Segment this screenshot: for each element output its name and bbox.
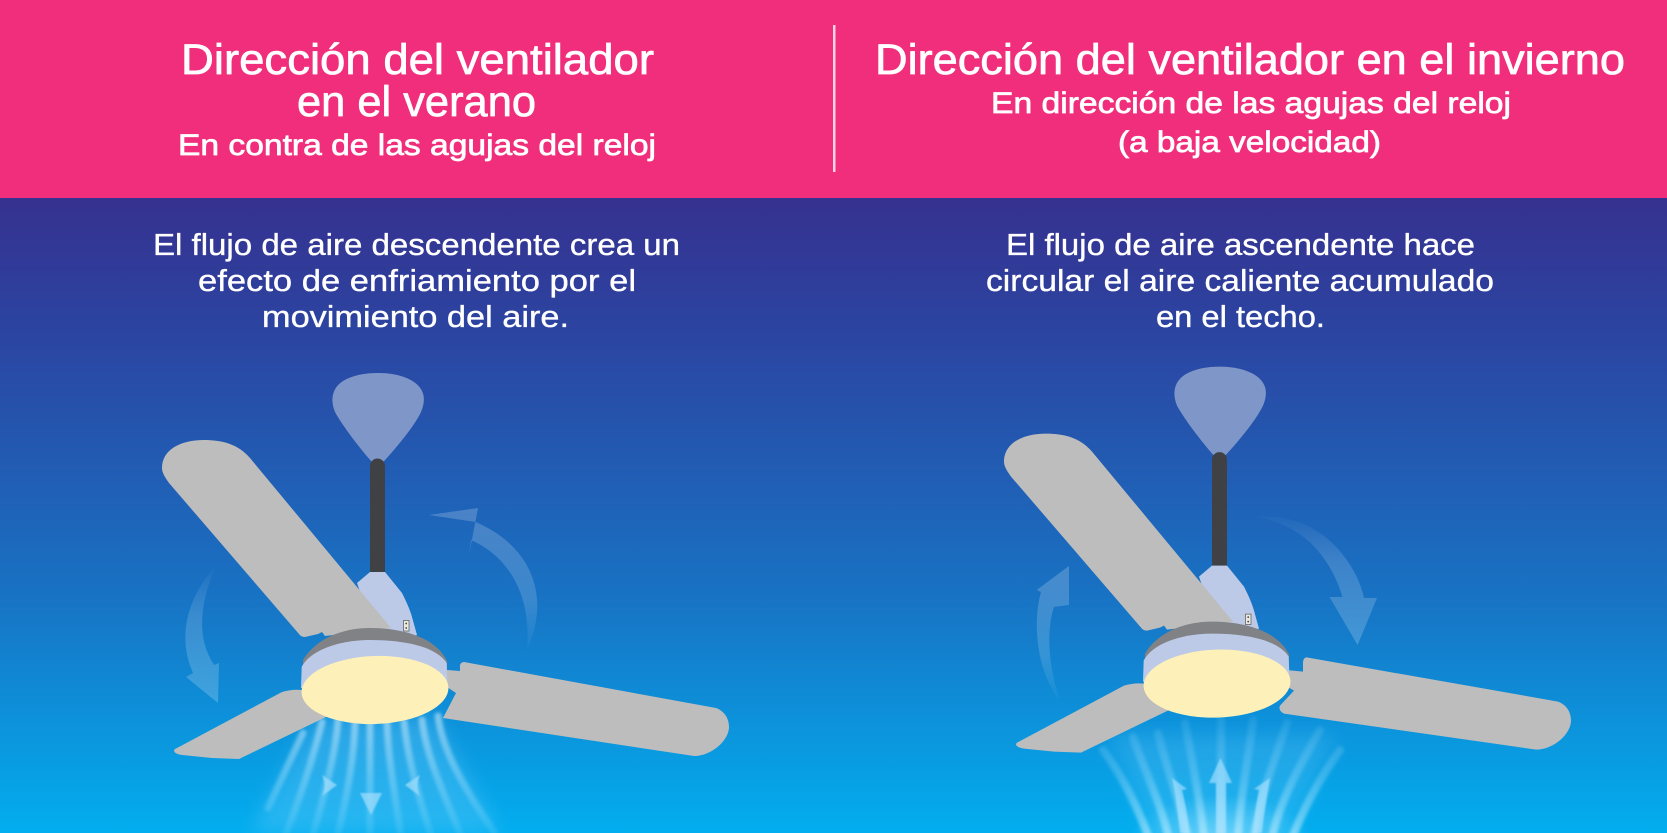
motor housing (1199, 566, 1259, 644)
background gradient panel (0, 198, 1667, 833)
text block: summer airflow (153, 227, 680, 334)
rotation arrow: counter-clockwise right (429, 508, 537, 650)
text block: winter airflow: El flujo de aire ascendente hace (1006, 227, 1475, 262)
blade: top left (1004, 434, 1233, 631)
header divider (833, 25, 836, 172)
text block: winter airflow (986, 227, 1494, 334)
rotation arrow: clockwise right (1254, 516, 1377, 645)
light band (301, 640, 448, 688)
canopy (1174, 367, 1266, 462)
fan: winter (1004, 367, 1571, 753)
motor housing (357, 572, 417, 650)
canopy (332, 373, 424, 468)
heading: summer: En contra de las agujas del reloj (178, 129, 656, 162)
rotation arrow: counter-clockwise left (185, 567, 219, 703)
motor ring (303, 628, 447, 672)
heading: winter: En dirección de las agujas del reloj (991, 87, 1511, 120)
up arrowheads (1172, 758, 1270, 833)
down arrowheads (322, 775, 420, 815)
text block: summer airflow: movimiento del aire. (262, 299, 569, 334)
text block: winter airflow: circular el aire caliente acumulado (986, 263, 1494, 298)
upward airflow streaks (1103, 720, 1340, 833)
text block: summer airflow: efecto de enfriamiento por el (198, 263, 636, 298)
motor ring (1145, 622, 1289, 666)
text block: summer airflow: El flujo de aire descendente crea un (153, 227, 680, 262)
light band (1143, 634, 1290, 682)
heading: summer: Dirección del ventilador (181, 37, 654, 84)
rotation arrow: clockwise left (1037, 566, 1069, 702)
downrod (1212, 452, 1227, 566)
badge (404, 620, 409, 631)
heading: winter: (a baja velocidad) (1118, 126, 1381, 159)
heading: winter: Dirección del ventilador en el invierno (875, 37, 1625, 84)
blade: top left (162, 440, 391, 637)
heading: summer (178, 37, 656, 162)
header band (0, 0, 1667, 198)
heading: winter (875, 37, 1625, 159)
heading: summer: en el verano (297, 79, 536, 126)
fan: summer (162, 373, 729, 759)
downrod (370, 458, 385, 572)
light disc (1142, 647, 1292, 720)
badge (1246, 614, 1251, 625)
blade: right (443, 662, 729, 756)
blade: right (1280, 657, 1571, 750)
blade: lower left (1016, 683, 1172, 753)
light disc (300, 653, 450, 727)
text block: winter airflow: en el techo. (1156, 299, 1325, 334)
downward airflow streaks (250, 716, 500, 833)
blade: lower left (174, 690, 330, 759)
